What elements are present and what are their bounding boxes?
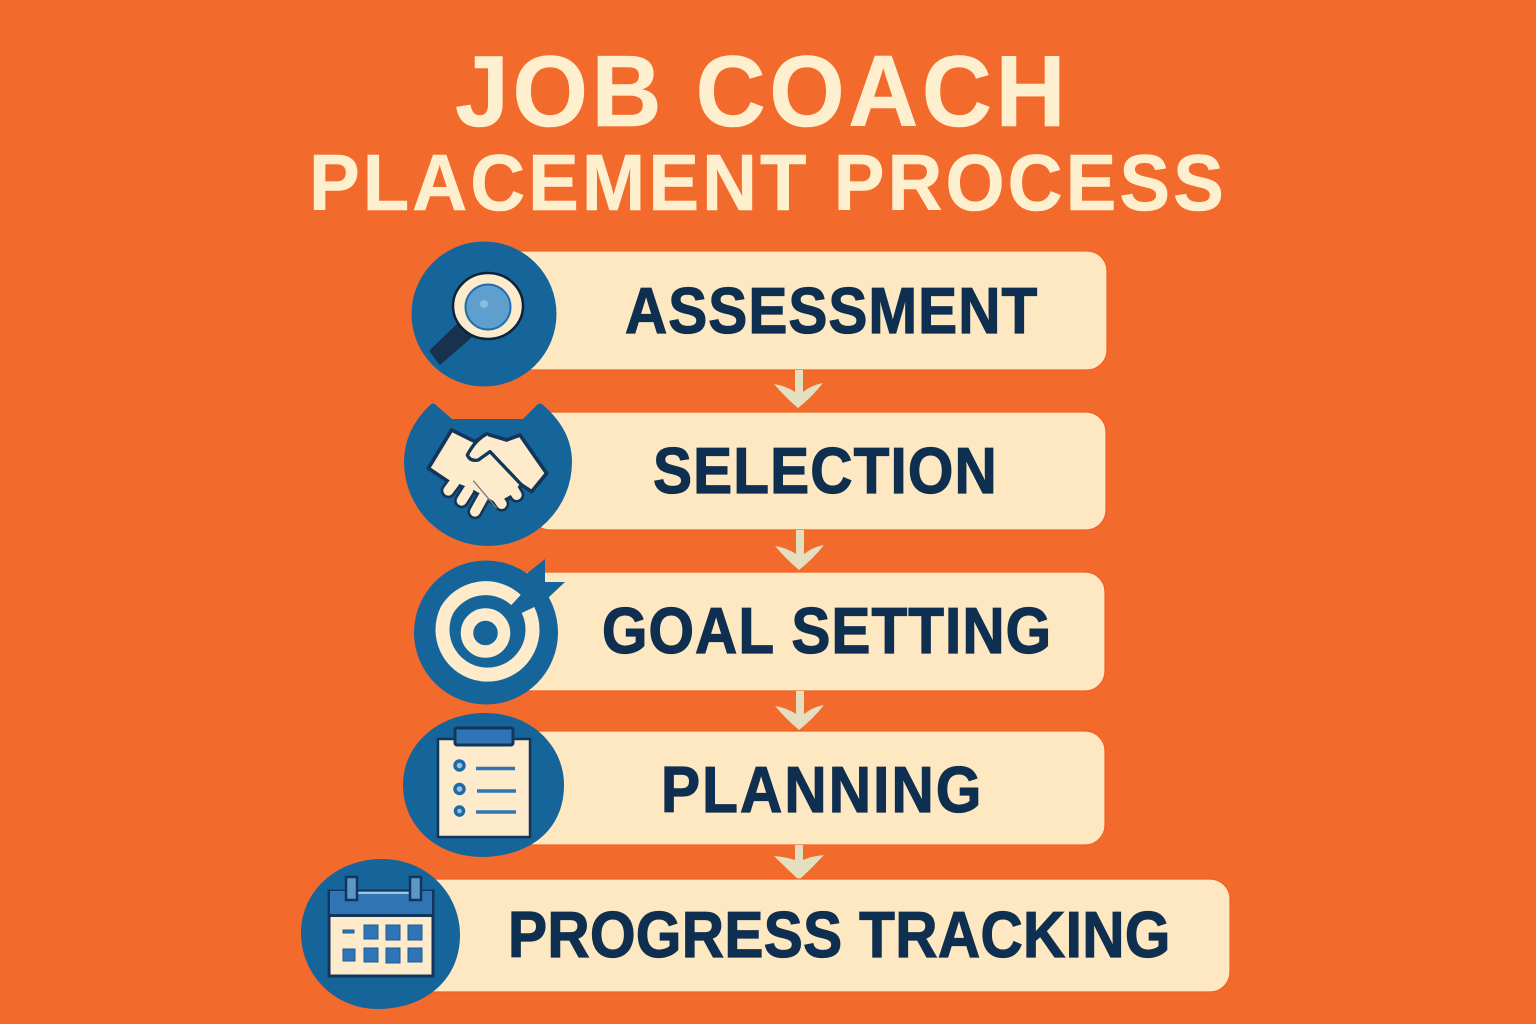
step 4: planning	[403, 713, 1105, 857]
title	[309, 34, 1224, 227]
bar: progress tracking	[400, 879, 1230, 992]
label: selection: SELECTION	[653, 435, 997, 508]
step 3: goal setting	[414, 559, 1105, 704]
title line: placement process: PLACEMENT PROCESS	[309, 137, 1224, 227]
label: goal setting: GOAL SETTING	[602, 595, 1051, 668]
bar: selection	[530, 412, 1106, 530]
checklist bullets	[455, 761, 464, 815]
title line: job coach: JOB COACH	[455, 34, 1066, 147]
label: assessment: ASSESSMENT	[625, 275, 1037, 348]
label: progress tracking: PROGRESS TRACKING	[508, 899, 1170, 972]
bar: planning	[500, 731, 1105, 845]
finger outlines	[448, 482, 517, 512]
label: planning: PLANNING	[661, 754, 981, 827]
arrow 1	[774, 370, 823, 408]
icon: target	[414, 559, 565, 704]
checklist lines	[476, 768, 516, 812]
step 2: selection	[404, 404, 1106, 546]
calendar rings	[346, 877, 421, 900]
icon: clipboard	[403, 713, 564, 857]
bar: goal setting	[500, 572, 1105, 691]
arrow 4	[774, 845, 824, 880]
finger fills	[448, 482, 517, 512]
step 5: progress tracking	[301, 859, 1230, 1009]
arrow 2	[775, 530, 824, 570]
icon: magnifying glass	[412, 242, 556, 386]
bar: assessment	[500, 251, 1107, 370]
icon: handshake	[404, 404, 572, 546]
arrow 3	[775, 691, 824, 730]
icon: calendar	[301, 859, 460, 1009]
step 1: assessment	[412, 242, 1107, 386]
calendar cells	[343, 925, 422, 963]
